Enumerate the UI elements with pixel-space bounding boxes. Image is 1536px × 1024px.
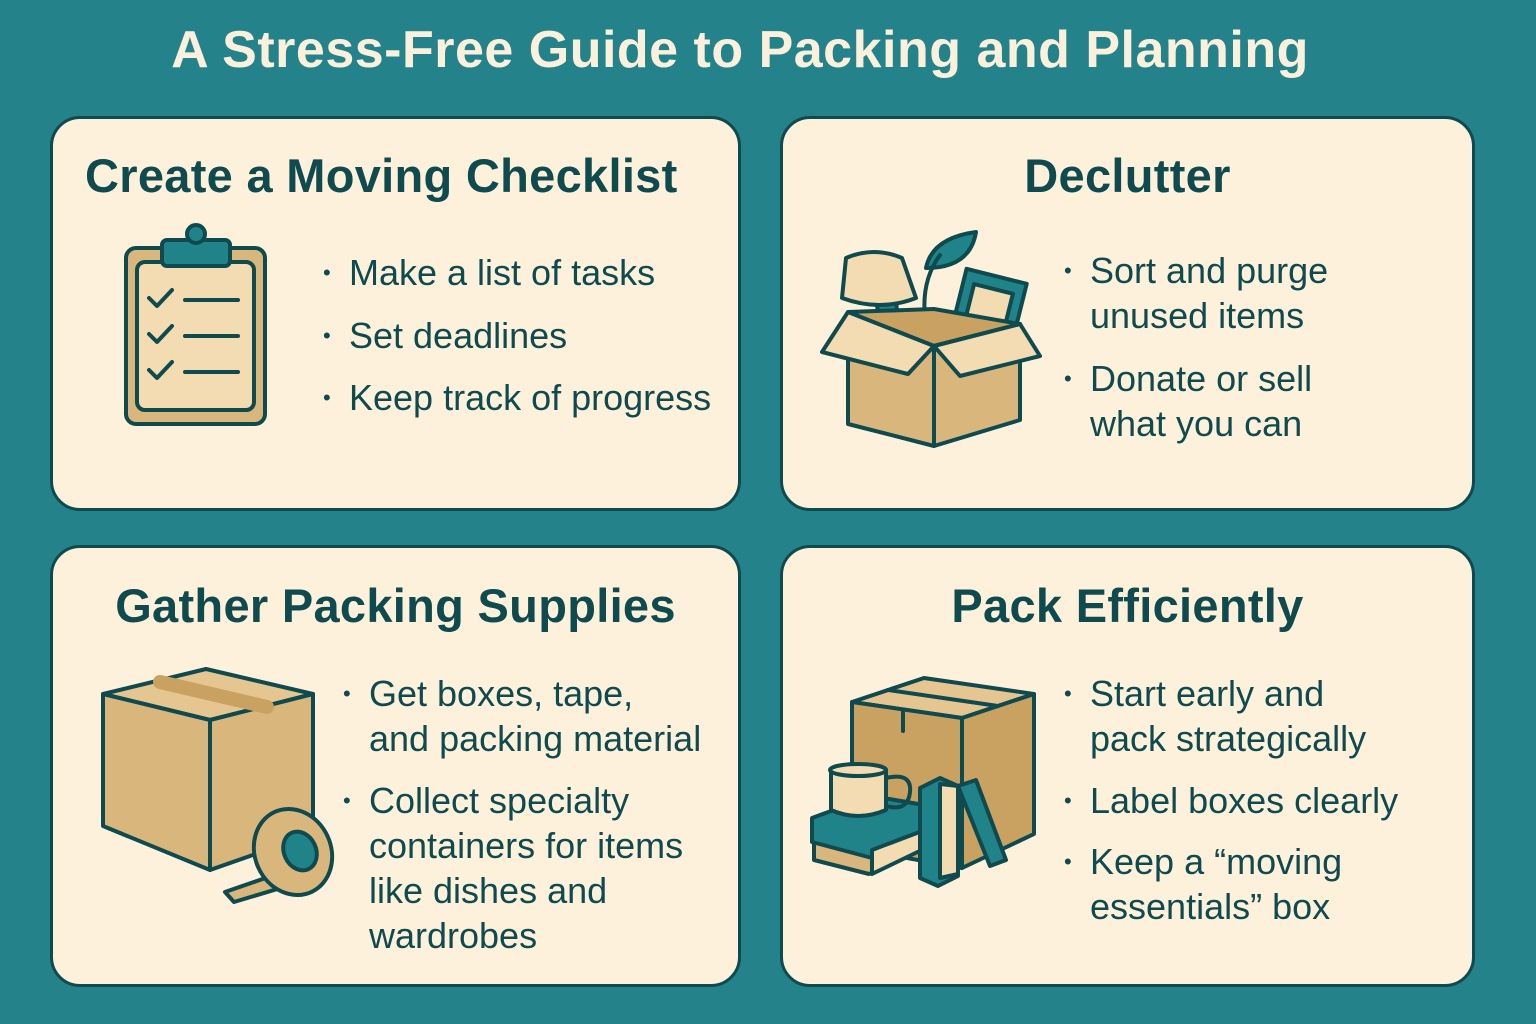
bullets: declutter: what you can: [1090, 403, 1302, 444]
bullets: pack: Keep a “moving: [1090, 841, 1342, 882]
bullets: supplies: Get boxes, tape,: [369, 673, 633, 714]
icon: box and tape: [103, 669, 346, 908]
icon: box, mug and books: [812, 678, 1034, 886]
bullets: supplies: Collect specialty: [369, 780, 629, 821]
heading: supplies: Gather Packing Supplies: [115, 579, 676, 632]
bullets: checklist: Keep track of progress: [349, 377, 711, 418]
bullets: checklist: Set deadlines: [349, 315, 567, 356]
bullets: checklist: Make a list of tasks: [349, 252, 655, 293]
bullets: supplies: like dishes and: [369, 870, 607, 911]
panel: supplies: [50, 545, 741, 987]
bullets: pack: [1064, 673, 1398, 927]
bullets: declutter: Sort and purge: [1090, 250, 1328, 291]
icon: clipboard: [126, 225, 265, 424]
bullets: supplies: containers for items: [369, 825, 683, 866]
title: A Stress-Free Guide to Packing and Planning: [171, 21, 1309, 79]
heading: checklist: Create a Moving Checklist: [85, 149, 678, 202]
bullets: pack: essentials” box: [1090, 886, 1330, 927]
bullets: supplies: [344, 673, 701, 956]
bullets: supplies: wardrobes: [369, 915, 537, 956]
bullets: declutter: [1064, 250, 1328, 444]
panel: declutter: [780, 116, 1475, 511]
bullets: declutter: Donate or sell: [1090, 358, 1312, 399]
bullets: supplies: and packing material: [369, 718, 701, 759]
panel: checklist: [50, 116, 741, 511]
bullets: checklist: [324, 252, 711, 418]
heading: pack: Pack Efficiently: [951, 579, 1304, 632]
panel: pack: [780, 545, 1475, 987]
bullets: pack: pack strategically: [1090, 718, 1366, 759]
icon: declutter box: [822, 232, 1040, 446]
bullets: declutter: unused items: [1090, 295, 1304, 336]
bullets: pack: Start early and: [1090, 673, 1324, 714]
bullets: pack: Label boxes clearly: [1090, 780, 1398, 821]
heading: declutter: Declutter: [1024, 149, 1231, 202]
